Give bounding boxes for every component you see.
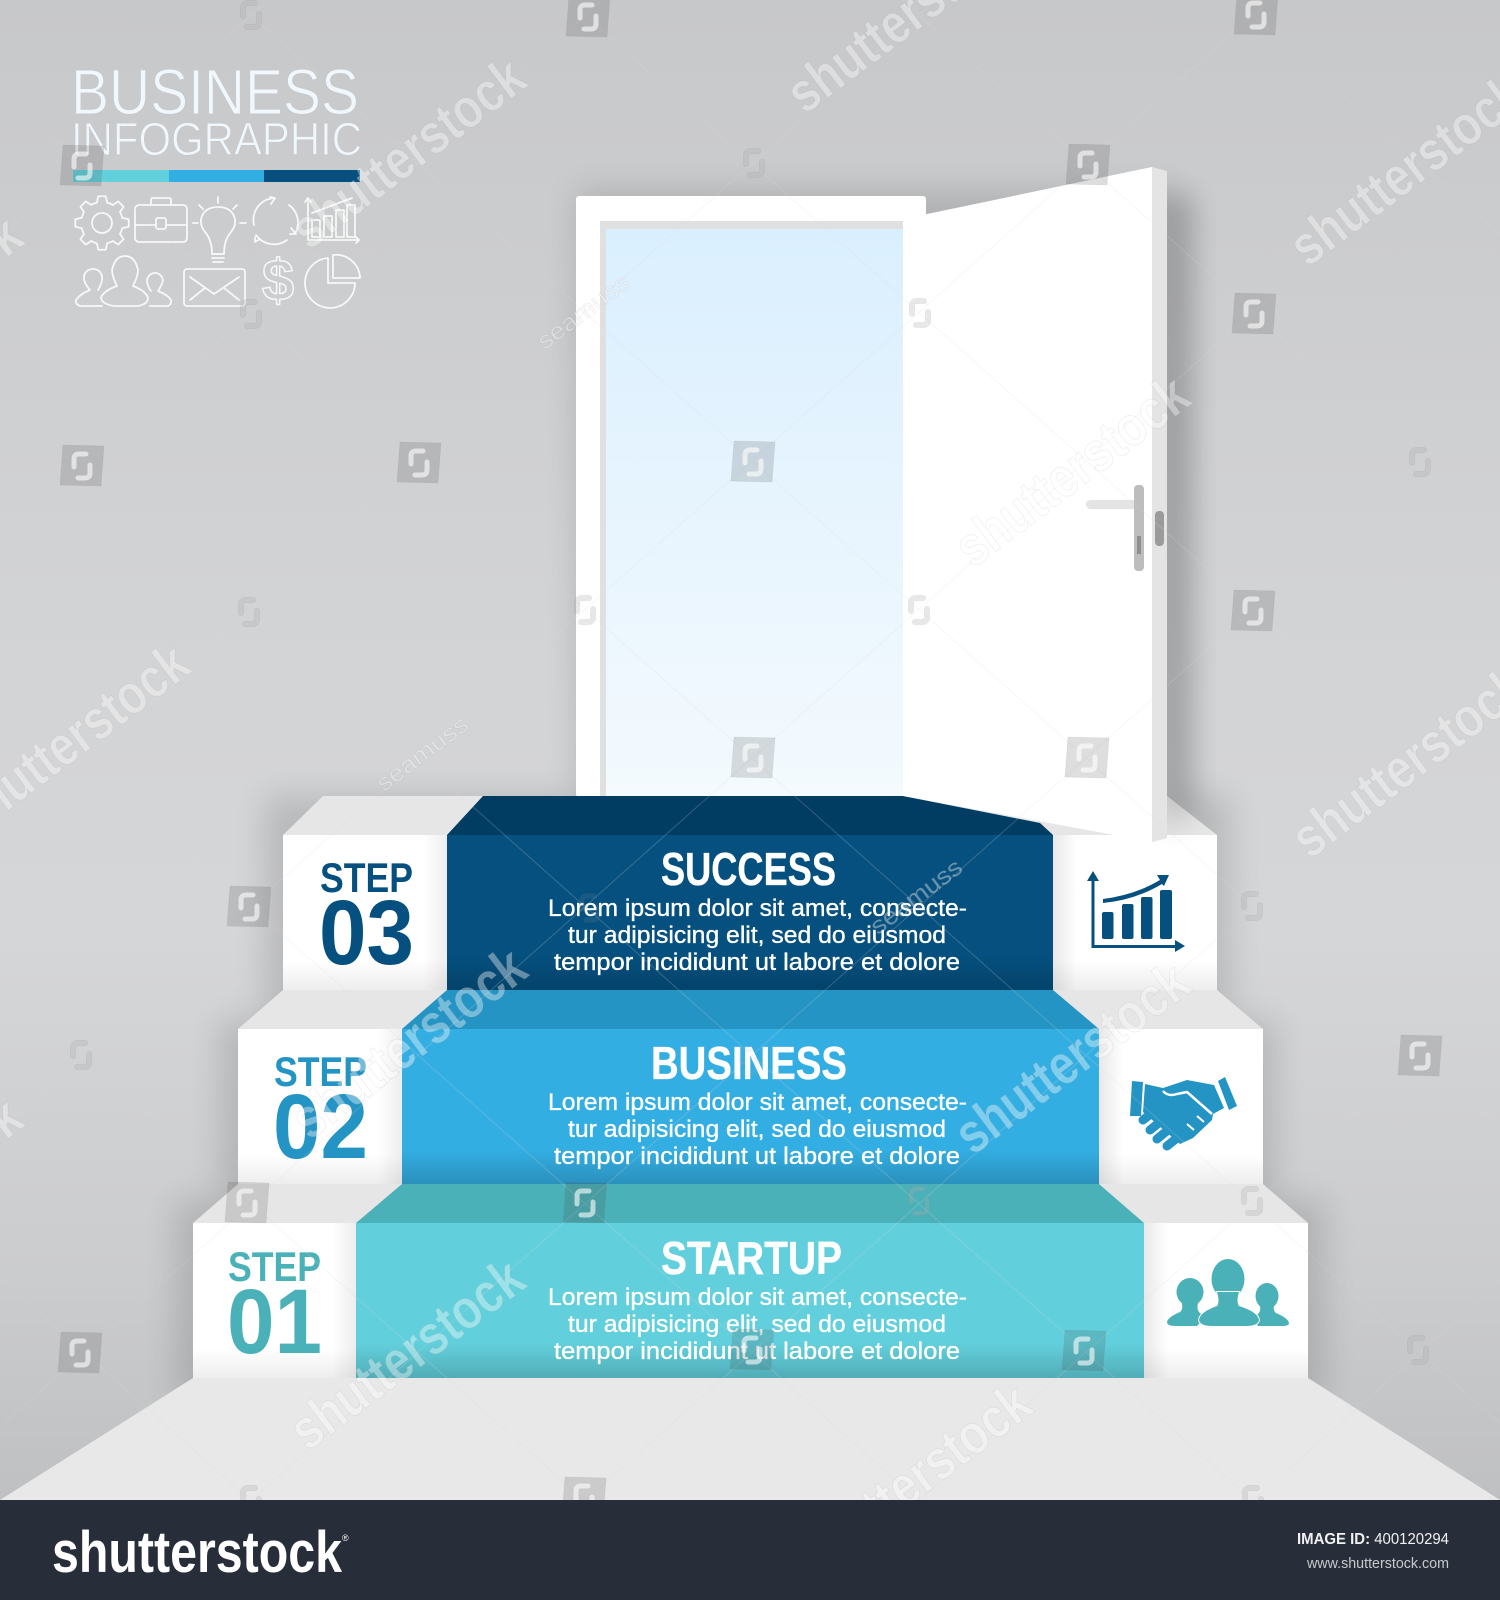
step 02 text: Lorem ipsum dolor sit amet, consecte-: [548, 1089, 967, 1116]
step 03 white front: [283, 835, 1217, 990]
open door: [903, 167, 1167, 842]
icon: people outline: [76, 256, 171, 306]
footer logo: shutterstock: [52, 1520, 343, 1585]
step 01 text: Lorem ipsum dolor sit amet, consecte-: [548, 1284, 967, 1311]
door handle: [1086, 485, 1164, 571]
door frame: [576, 196, 926, 797]
step 02 text: tur adipisicing elit, sed do eiusmod: [568, 1116, 946, 1143]
watermarks: seamuss: [865, 854, 968, 940]
watermarks: seamuss: [371, 711, 474, 797]
icon: pie chart: [305, 255, 360, 308]
watermarks: shutterstock: [279, 934, 538, 1151]
title: BUSINESS: [71, 56, 359, 128]
step 03 top surface: [283, 796, 1217, 835]
icon: refresh arrows: [253, 197, 298, 244]
icon: gear: [75, 196, 129, 250]
step 03 blue front: [447, 835, 1053, 990]
icon: briefcase: [135, 198, 187, 242]
footer registered mark: ®: [342, 1533, 349, 1543]
step 01 teal front: [356, 1223, 1144, 1378]
watermarks: shutterstock: [278, 44, 537, 261]
step 03 text: Lorem ipsum dolor sit amet, consecte-: [548, 895, 967, 922]
title: [71, 56, 362, 165]
step 02 label: 02: [273, 1076, 368, 1178]
icon: envelope: [184, 269, 245, 306]
outline icon set: [75, 196, 360, 313]
step 03 text: tempor incididunt ut labore et dolore: [554, 949, 960, 976]
step 01 text: [548, 1232, 967, 1365]
step 02 label: STEP: [274, 1048, 367, 1095]
step 01 top surface: [193, 1184, 1308, 1223]
step 01 label: STEP: [228, 1243, 321, 1290]
step 02 text: [548, 1037, 967, 1170]
footer bar: [0, 1500, 1500, 1600]
step 03 text: [548, 843, 967, 976]
door leaf front: [903, 167, 1152, 842]
title colour bar: [73, 170, 360, 182]
step 01 text: tur adipisicing elit, sed do eiusmod: [568, 1311, 946, 1338]
step 02 top surface: [238, 990, 1263, 1029]
door shadow: [1160, 190, 1195, 830]
frame reveal: [600, 221, 910, 797]
watermarks: shutterstock: [942, 949, 1201, 1166]
watermarks: shutterstock: [942, 362, 1201, 579]
step 02 blue front: [402, 1029, 1099, 1184]
watermarks: seamuss: [532, 269, 635, 355]
step 02 text: BUSINESS: [651, 1037, 847, 1089]
icon: light bulb: [193, 197, 246, 262]
step 02 ramp top: [402, 990, 1099, 1029]
footer url: www.shutterstock.com: [1306, 1555, 1449, 1572]
icon: people: [1167, 1259, 1289, 1326]
title: INFOGRAPHIC: [71, 113, 362, 165]
step 01 label: 01: [227, 1271, 322, 1373]
step 03 label: STEP: [320, 854, 413, 901]
floor: [0, 1378, 1500, 1500]
panel: step 02 business: [238, 990, 1263, 1184]
panel: step 03 success: [283, 796, 1217, 990]
footer image id: IMAGE ID: 400120294: [1297, 1531, 1449, 1548]
icon: growth chart: [1087, 871, 1185, 952]
watermarks: shutterstock: [277, 1245, 536, 1462]
watermarks: shutterstock: [784, 1370, 1043, 1587]
step 03 ramp top: [447, 796, 1053, 835]
step 03 text: tur adipisicing elit, sed do eiusmod: [568, 922, 946, 949]
stairs shadow on wall: [175, 190, 1325, 1400]
step 01 ramp top: [356, 1184, 1144, 1223]
step 03 label: 03: [319, 882, 414, 984]
step 02 white front: [238, 1029, 1263, 1184]
step 01 text: STARTUP: [661, 1232, 842, 1284]
icon: bar chart outline: [305, 198, 359, 243]
sky opening: [606, 229, 910, 797]
panel: step 01 startup: [193, 1184, 1308, 1378]
door edge: [1152, 167, 1167, 842]
icon: dollar: $: [262, 248, 294, 313]
step 01 text: tempor incididunt ut labore et dolore: [554, 1338, 960, 1365]
step 01 white front: [193, 1223, 1308, 1378]
step 03 text: SUCCESS: [661, 843, 836, 895]
icon: handshake: [1130, 1077, 1237, 1146]
step 02 text: tempor incididunt ut labore et dolore: [554, 1143, 960, 1170]
